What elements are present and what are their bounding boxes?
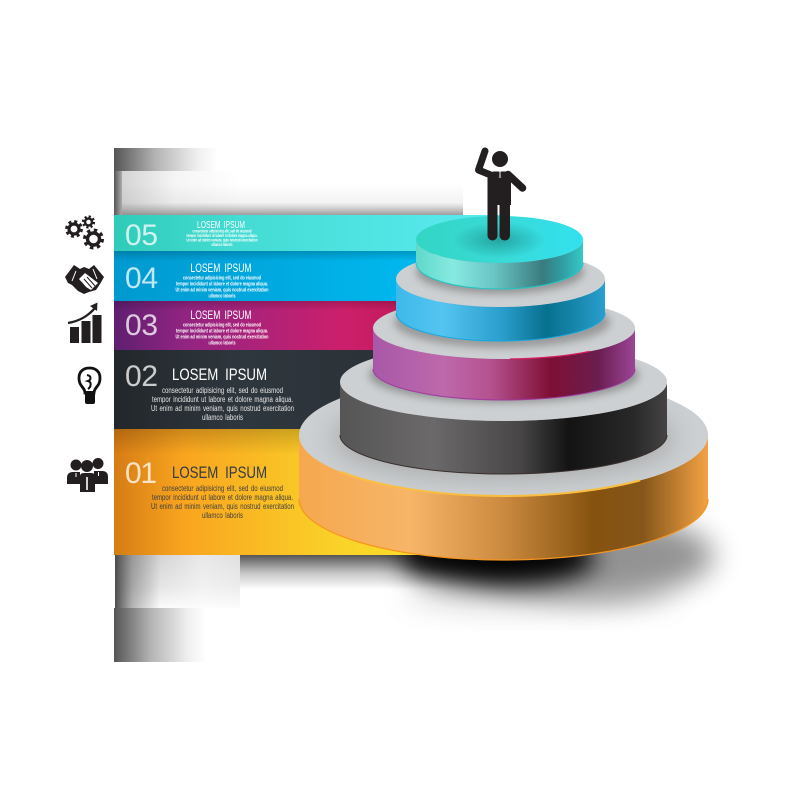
- number 03: 03: [125, 309, 158, 342]
- body text 02: Ut enim ad minim veniam, quis nostrud exercitation: [151, 404, 294, 413]
- tier 3: magenta cylinder: [373, 296, 635, 400]
- body text 01: [151, 484, 294, 520]
- body text 02: ullamco laboris: [202, 413, 243, 422]
- pyramid ground shadow: [400, 514, 714, 608]
- body text 05: consectetur adipisicing elit, sed do eiusmod: [192, 228, 252, 234]
- icon: gears: [66, 216, 102, 248]
- body text 03: tempor incididunt ut labore et dolore magna aliqua.: [176, 328, 268, 334]
- panel: band 05: [114, 215, 500, 252]
- icon: growth chart: [68, 302, 102, 343]
- panel: band 01: [114, 429, 464, 555]
- body text 04: tempor incididunt ut labore et dolore magna aliqua.: [176, 282, 268, 288]
- icon: business team: [67, 458, 108, 492]
- panel: band 04: [114, 251, 434, 301]
- body text 04: Ut enim ad minim veniam, quis nostrud exercitation: [176, 288, 268, 294]
- upper background shadow: [114, 148, 463, 215]
- body text 05: Ut enim ad minim veniam, quis nostrud exercitation: [186, 238, 258, 242]
- icon: businessman on top: [478, 151, 522, 241]
- heading 03: LOSEM IPSUM: [190, 308, 252, 322]
- body text 02: consectetur adipisicing elit, sed do eiusmod: [162, 386, 283, 395]
- heading 02: LOSEM IPSUM: [172, 365, 267, 384]
- body text 03: consectetur adipisicing elit, sed do eiusmod: [183, 322, 261, 328]
- body text 01: consectetur adipisicing elit, sed do eiusmod: [162, 484, 283, 493]
- body text 04: [176, 276, 268, 300]
- body text 03: [176, 322, 268, 346]
- body text 05: [186, 228, 258, 247]
- number 02: 02: [125, 360, 158, 393]
- body text 02: [151, 386, 294, 422]
- tier 5: teal cylinder: [416, 216, 583, 289]
- body text 05: ullamco laboris: [212, 242, 233, 247]
- heading 05: LOSEM IPSUM: [197, 220, 245, 231]
- heading 01: LOSEM IPSUM: [172, 463, 267, 482]
- body text 02: tempor incididunt ut labore et dolore magna aliqua.: [152, 395, 293, 404]
- body text 01: tempor incididunt ut labore et dolore magna aliqua.: [152, 493, 293, 502]
- body text 03: Ut enim ad minim veniam, quis nostrud exercitation: [176, 334, 268, 340]
- tier 2: black cylinder: [340, 343, 667, 474]
- body text 03: ullamco laboris: [208, 340, 236, 346]
- panel: band 02: [114, 350, 374, 429]
- heading 04: LOSEM IPSUM: [190, 261, 252, 275]
- lower background shadow: [114, 555, 510, 662]
- tier 4: blue cylinder: [396, 250, 605, 341]
- number 05: 05: [125, 219, 158, 252]
- icon: handshake: [65, 265, 104, 294]
- icon: light bulb: [79, 368, 100, 404]
- body text 01: ullamco laboris: [202, 511, 243, 520]
- body text 01: Ut enim ad minim veniam, quis nostrud exercitation: [151, 502, 294, 511]
- body text 04: ullamco laboris: [208, 294, 236, 300]
- body text 05: tempor incididunt ut labore et dolore magna aliqua.: [186, 233, 258, 238]
- number 04: 04: [125, 262, 158, 295]
- panel: band 03: [114, 301, 404, 350]
- body text 04: consectetur adipisicing elit, sed do eiusmod: [183, 276, 261, 282]
- number 01: 01: [125, 457, 157, 490]
- tier 1: orange cylinder: [298, 395, 709, 561]
